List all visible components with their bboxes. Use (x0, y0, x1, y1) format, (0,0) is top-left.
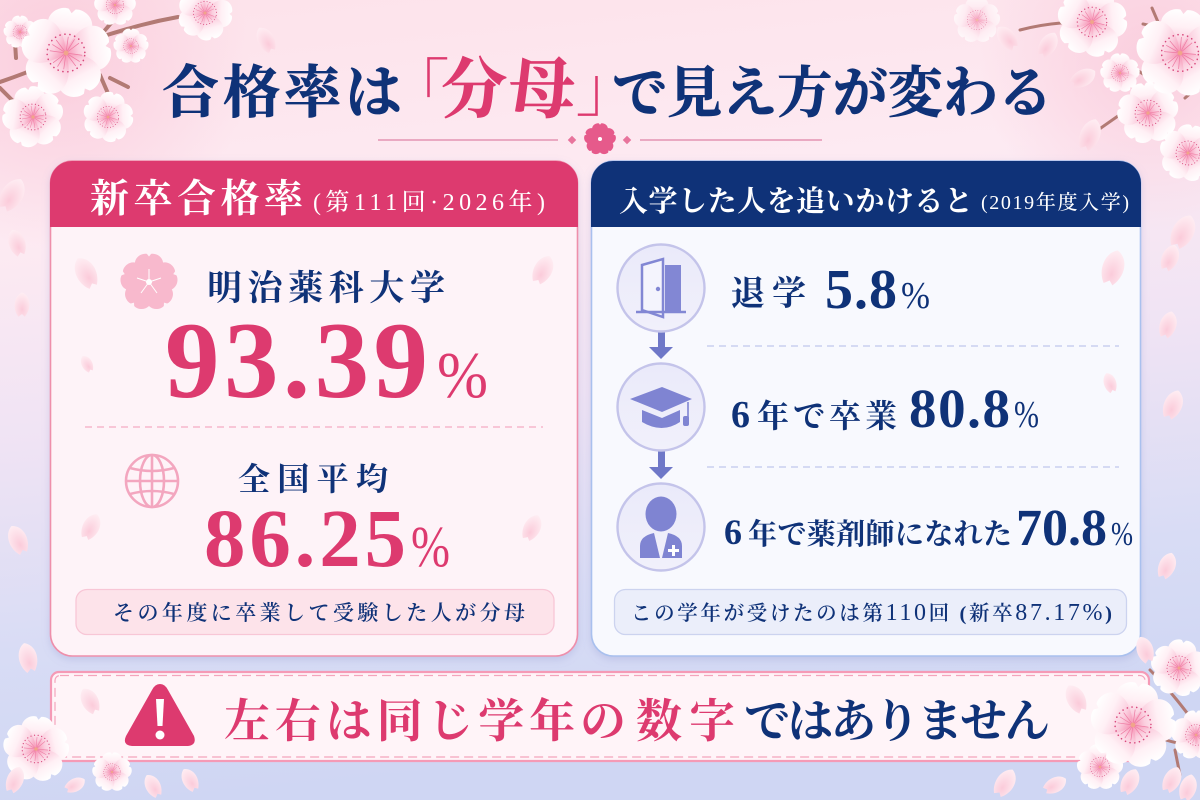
panel header: (2019年度入学) (981, 190, 1129, 214)
graduation stat: 年で卒業 (757, 398, 897, 434)
graduation stat: 80.8 (909, 378, 1010, 439)
panel header: (第111回·2026年) (313, 189, 545, 216)
pharmacist stat: 70.8 (1016, 500, 1107, 557)
dropout stat: % (901, 275, 930, 317)
icon: sakura (118, 254, 180, 313)
graduation stat (731, 378, 1039, 439)
title: 「 (387, 56, 449, 124)
cherry blossoms: bottom right (990, 634, 1200, 800)
pharmacist stat: % (1111, 516, 1133, 553)
callout banner (51, 672, 1149, 761)
title: 分母 (441, 54, 575, 127)
petals (1098, 248, 1128, 394)
panel card (592, 161, 1140, 656)
cherry blossoms: top right (952, 0, 1200, 581)
note: denominator (76, 590, 554, 634)
national average label: 全国平均 (238, 461, 388, 497)
national average rate: % (411, 514, 450, 579)
panel card (50, 161, 578, 656)
dropout stat: 5.8 (825, 259, 897, 321)
callout text (224, 696, 1050, 747)
graduation stat: 6 (731, 394, 750, 436)
national average rate: 86.25 (204, 492, 406, 584)
title (162, 54, 1053, 127)
panel header (591, 161, 1141, 227)
university rate: % (437, 339, 488, 412)
icon: pharmacist (618, 484, 704, 570)
dropout stat: 退学 (731, 275, 806, 313)
title: で見え方が変わる (612, 63, 1053, 124)
callout text: 左右は同じ学年の (224, 696, 626, 747)
cherry blossoms: top left (0, 0, 280, 317)
note: exam taken (614, 590, 1126, 634)
petals (69, 252, 558, 543)
note: exam taken: この学年が受けたのは第110回 (新卒87.17%) (631, 600, 1112, 626)
arrow: to pharmacist (649, 451, 673, 479)
note: denominator: その年度に卒業して受験した人が分母 (113, 601, 525, 625)
panel header (50, 161, 578, 227)
pharmacist stat (724, 500, 1133, 557)
icon: globe (126, 455, 178, 507)
dropout stat (731, 259, 930, 321)
panel: cohort tracking (591, 161, 1141, 656)
university name: 明治薬科大学 (207, 269, 445, 308)
title: 」 (576, 56, 638, 124)
icon: door (618, 244, 704, 332)
panel: new graduate pass rate (50, 161, 578, 656)
callout text: ではありません (744, 696, 1050, 747)
university rate: 93.39 (165, 300, 428, 421)
pharmacist stat: 6 (724, 512, 742, 552)
title ornament (378, 123, 822, 156)
panel header: 新卒合格率 (90, 178, 304, 221)
cherry blossoms: bottom left (0, 522, 202, 800)
title: 合格率は (162, 62, 402, 125)
graduation stat: % (1014, 394, 1039, 436)
panel header: 入学した人を追いかけると (619, 185, 973, 218)
icon: warning (125, 684, 195, 746)
callout text: 数字 (636, 696, 735, 747)
arrow: to graduation (649, 332, 673, 359)
pharmacist stat: 年で薬剤師になれた (748, 518, 1012, 551)
icon: graduation cap (618, 364, 704, 450)
